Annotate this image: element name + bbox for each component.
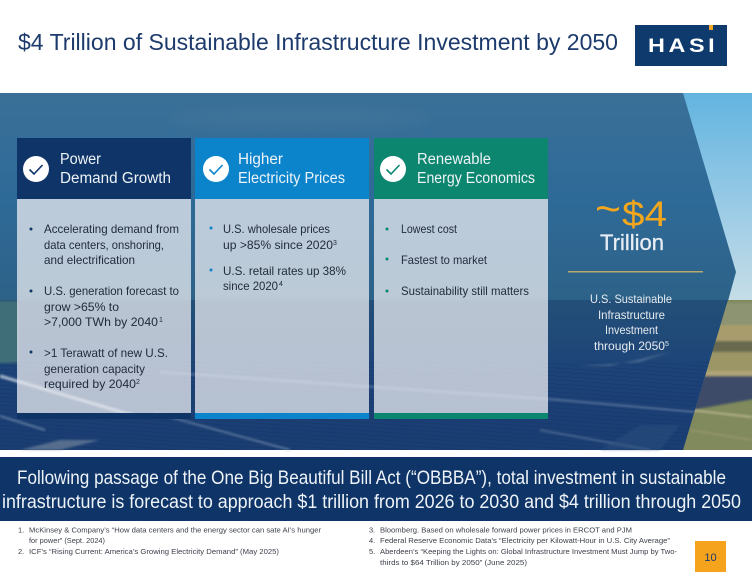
title: $4 Trillion of Sustainable Infrastructure Investment by 2050	[18, 29, 618, 55]
footnotes: right column: 5.	[369, 547, 375, 556]
footnotes: right column: 3.	[369, 526, 375, 534]
heading: renewable energy economics	[417, 151, 535, 187]
heading: power demand growth: Demand Growth	[60, 170, 171, 187]
bullet list: price increases: since 2020	[223, 279, 278, 293]
bullet list: price increases: 3	[333, 240, 337, 247]
bullet list: price increases: up >85% since 2020	[223, 238, 333, 252]
bullet list: economics: Lowest cost	[401, 222, 458, 236]
footnotes: right column: Aberdeen’s “Keeping the Lights on: Global Infrastructure Investment Must Jump by Two-	[380, 547, 678, 556]
callout description: Investment	[605, 323, 659, 337]
footnotes: right column: Bloomberg. Based on wholesale forward power prices in ERCOT and PJM	[380, 526, 632, 534]
footnotes: left column: ICF’s “Rising Current: America’s Growing Electricity Demand” (May 2025)	[29, 547, 280, 556]
callout description: U.S. Sustainable	[590, 292, 672, 306]
heading: renewable energy economics: Renewable	[417, 151, 491, 168]
background photo: solar farm under sky	[0, 93, 752, 450]
chevron: right photo area outside the overlay	[680, 93, 752, 450]
unit label: Trillion	[600, 230, 664, 255]
callout description: through 2050	[594, 339, 665, 353]
footnotes: right column	[369, 526, 678, 567]
heading: power demand growth	[60, 151, 171, 187]
big number: $4	[622, 195, 667, 234]
icon: check circle	[23, 156, 49, 182]
bullet list: economics	[386, 222, 529, 298]
heading: higher electricity prices	[238, 151, 345, 187]
bullet list: demand drivers: generation capacity	[44, 362, 145, 376]
bullet list: demand drivers: data centers, onshoring,	[44, 238, 164, 252]
logo: HASI	[635, 25, 727, 66]
bullet list: price increases: U.S. wholesale prices	[223, 222, 330, 236]
bullet list: demand drivers: 2	[136, 379, 140, 386]
callout description: Infrastructure	[598, 308, 665, 322]
bullet list: price increases: 4	[279, 281, 283, 288]
bullet list: demand drivers: >1 Terawatt of new U.S.	[44, 346, 168, 360]
bullet list: economics: Fastest to market	[401, 253, 488, 267]
heading: power demand growth: Power	[60, 151, 101, 168]
bullet list: demand drivers: grow >65% to	[44, 300, 119, 314]
icon: check circle	[380, 156, 406, 182]
callout description: 5	[665, 341, 669, 348]
bullet list: price increases	[210, 222, 346, 293]
heading: higher electricity prices: Higher	[238, 151, 283, 168]
callout: about $4 trillion	[568, 185, 703, 353]
page number	[695, 541, 726, 572]
bullet list: demand drivers: required by 2040	[44, 377, 136, 391]
page number: 10	[704, 552, 717, 564]
heading: higher electricity prices: Electricity Prices	[238, 170, 345, 187]
big number: ~	[595, 185, 621, 232]
footnotes: left column: for power” (Sept. 2024)	[29, 536, 105, 545]
panel: higher electricity prices	[195, 138, 369, 419]
heading: renewable energy economics: Energy Economics	[417, 170, 535, 187]
footnotes: left column	[18, 526, 322, 556]
logo: HASI: HASI	[648, 35, 718, 57]
footnotes: right column: 4.	[369, 536, 375, 545]
panel: power demand growth	[17, 138, 191, 419]
bullet list: demand drivers	[30, 222, 179, 391]
bullet list: demand drivers: 1	[159, 317, 163, 324]
banner: OBBBA forecast	[0, 457, 752, 521]
bullet list: price increases: U.S. retail rates up 38%	[223, 264, 346, 278]
bullet list: demand drivers: and electrification	[44, 253, 135, 267]
footnotes: right column: Federal Reserve Economic Data’s “Electricity per Kilowatt-Hour in U.S. City Average”	[380, 536, 671, 545]
bullet list: economics: Sustainability still matters	[401, 284, 529, 298]
footnotes: left column: McKinsey & Company’s “How data centers and the energy sector can sate AI’s hunger	[29, 526, 322, 534]
big number	[595, 185, 667, 234]
callout description	[590, 292, 672, 353]
footnotes: left column: 2.	[18, 547, 24, 556]
bullet list: demand drivers: U.S. generation forecast to	[44, 284, 179, 298]
icon: check circle	[203, 156, 229, 182]
footnotes: left column: 1.	[18, 526, 24, 534]
panel: renewable energy economics	[374, 138, 548, 419]
bullet list: demand drivers: >7,000 TWh by 2040	[44, 315, 158, 329]
bullet list: demand drivers: Accelerating demand from	[44, 222, 179, 236]
footnotes: right column: thirds to $64 Trillion by 2050” (June 2025)	[380, 558, 528, 567]
